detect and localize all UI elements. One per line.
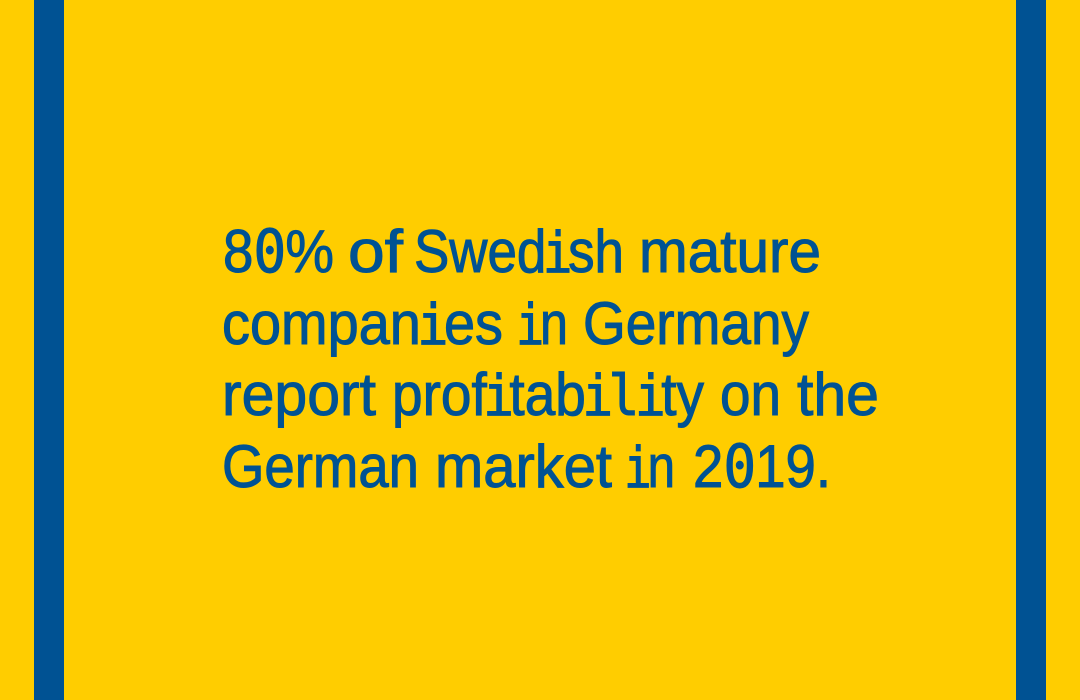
headline line 3: [222, 361, 879, 429]
headline line 3: report: [222, 361, 376, 428]
headline line 1: 80%: [223, 217, 334, 287]
headline line 4: 2019.: [693, 432, 831, 502]
left blue bar: [34, 0, 64, 700]
headline line 2: [222, 290, 809, 358]
headline line 2: companies: [222, 290, 503, 358]
headline line 1: of: [348, 218, 403, 285]
headline line 1: Swedish: [414, 218, 624, 286]
headline line 4: in: [624, 433, 675, 501]
headline line 4: market: [435, 433, 612, 500]
headline line 1: [223, 217, 821, 287]
headline line 4: German: [222, 433, 419, 500]
headline line 1: mature: [639, 218, 821, 285]
headline line 2: in: [516, 290, 568, 358]
right blue bar: [1016, 0, 1046, 700]
headline line 2: Germany: [583, 290, 809, 357]
headline line 3: the: [797, 361, 879, 428]
headline line 3: profitability: [392, 361, 704, 429]
headline line 3: on: [720, 361, 781, 428]
headline line 4: [222, 432, 831, 502]
